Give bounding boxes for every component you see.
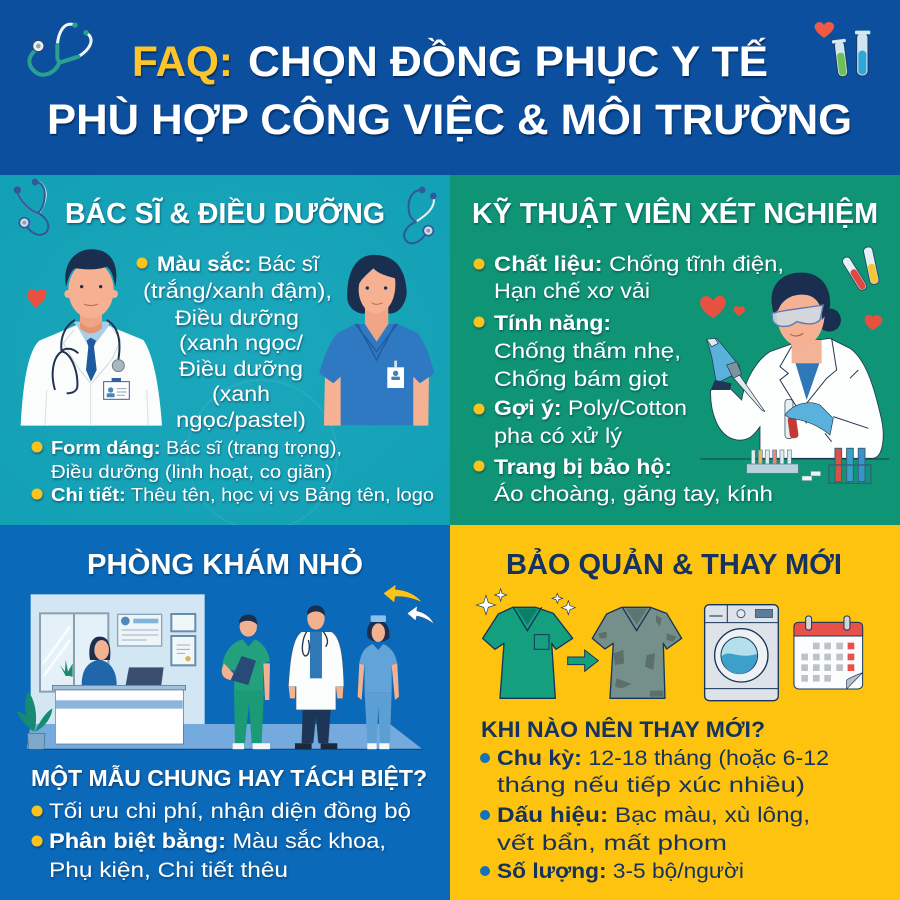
text: Màu sắc	[136, 252, 332, 432]
text: Form dáng và Chi tiết: Điều dưỡng (linh hoạt, co giãn)	[51, 461, 332, 482]
title: PHÙ HỢP CÔNG VIỆC & MÔI TRƯỜNG	[47, 95, 852, 144]
icon: heart	[27, 289, 46, 308]
text: Màu sắc: (xanh	[212, 383, 270, 406]
text: list: Chất liệu: Chống tĩnh điện,	[494, 253, 784, 276]
text: list	[480, 747, 829, 883]
illustration: nurse	[319, 255, 434, 426]
text: list: pha có xử lý	[494, 425, 623, 448]
nurse	[367, 621, 390, 642]
calendar	[794, 622, 863, 689]
tube and glove	[785, 399, 793, 439]
worn shirt	[592, 607, 682, 698]
text: list: Trang bị bảo hộ:	[494, 456, 672, 479]
text: list: vết bẩn, mất phom	[497, 832, 727, 855]
text: list: Hạn chế xơ vải	[494, 280, 650, 303]
icon: stethoscope right	[404, 188, 436, 243]
coat	[711, 338, 883, 458]
icon: stethoscope left	[15, 180, 48, 235]
text: list: Phân biệt bằng: Màu sắc khoa,	[49, 829, 386, 853]
panel: header	[0, 0, 900, 175]
text: list	[474, 253, 784, 506]
bench	[700, 457, 889, 460]
title: CHỌN ĐỒNG PHỤC Y TẾ	[248, 37, 768, 86]
text: Màu sắc: Màu sắc: Bác sĩ	[157, 252, 320, 276]
heading: KỸ THUẬT VIÊN XÉT NGHIỆM	[472, 196, 878, 230]
doctor	[307, 607, 325, 630]
panel: Bảo quản & thay mới	[450, 525, 900, 900]
sparkles	[476, 589, 575, 615]
text: list: Gợi ý: Poly/Cotton	[494, 397, 687, 420]
title	[47, 37, 852, 144]
hearts	[700, 296, 882, 330]
window	[40, 613, 108, 692]
text: list: Dấu hiệu: Bạc màu, xù lông,	[497, 804, 810, 827]
pipette and glove	[727, 365, 765, 412]
text: list: Chu kỳ: 12-18 tháng (hoặc 6-12	[497, 747, 829, 770]
arrow	[568, 650, 598, 671]
panel: Phòng khám nhỏ	[0, 525, 450, 900]
text: Form dáng và Chi tiết	[32, 437, 434, 505]
text: list: Tối ưu chi phí, nhận diện đồng bộ	[49, 800, 411, 823]
text: Màu sắc: Điều dưỡng	[175, 307, 299, 330]
text: Màu sắc: (xanh ngọc/	[179, 332, 303, 355]
panel: Bác sĩ & Điều dưỡng	[0, 175, 450, 530]
scrubs man	[240, 617, 257, 637]
text: Màu sắc: ngọc/pastel)	[176, 409, 306, 432]
illustration: clinic	[17, 584, 434, 749]
icons: shirts, washer, calendar	[476, 589, 863, 701]
text: list: Chống thấm nhẹ,	[494, 340, 681, 363]
text: list: Áo choàng, găng tay, kính	[494, 483, 773, 506]
illustration: doctor	[21, 249, 162, 426]
text: Màu sắc: Điều dưỡng	[179, 358, 303, 381]
text: list: Số lượng: 3-5 bộ/người	[497, 860, 744, 883]
floor plant	[17, 692, 52, 732]
desk	[52, 685, 186, 690]
test tubes	[841, 255, 868, 292]
arrows	[383, 584, 422, 603]
illustration: lab technician	[700, 246, 889, 483]
subheading: MỘT MẪU CHUNG HAY TÁCH BIỆT?	[31, 763, 427, 791]
receptionist	[89, 637, 110, 660]
heading: PHÒNG KHÁM NHỎ	[87, 547, 363, 581]
text: list: Chống bám giọt	[494, 368, 668, 391]
heading: BÁC SĨ & ĐIỀU DƯỠNG	[65, 196, 385, 230]
heading: BẢO QUẢN & THAY MỚI	[506, 547, 842, 581]
plant	[60, 660, 73, 677]
head	[818, 308, 841, 332]
washer	[705, 605, 778, 701]
watermark	[187, 380, 337, 530]
text: list: Tính năng:	[494, 312, 611, 335]
panel: Kỹ thuật viên xét nghiệm	[450, 175, 900, 525]
icon: header stethoscope	[29, 22, 91, 75]
posters	[118, 614, 162, 646]
monitor	[126, 667, 164, 685]
new shirt	[483, 607, 573, 698]
text: Form dáng và Chi tiết: Form dáng: Bác sĩ (trang trọng),	[51, 437, 342, 458]
subheading: KHI NÀO NÊN THAY MỚI?	[481, 717, 765, 742]
text: list: tháng nếu tiếp xúc nhiều)	[497, 774, 805, 797]
text: list	[32, 800, 411, 882]
title: FAQ:	[132, 38, 233, 86]
text: Form dáng và Chi tiết: Chi tiết: Thêu tên, học vị vs Bảng tên, logo	[51, 484, 434, 505]
text: list: Phụ kiện, Chi tiết thêu	[49, 859, 288, 882]
text: Màu sắc: (trắng/xanh đậm),	[143, 280, 332, 303]
icon: header heart and test tubes	[815, 22, 870, 77]
room	[31, 594, 205, 724]
